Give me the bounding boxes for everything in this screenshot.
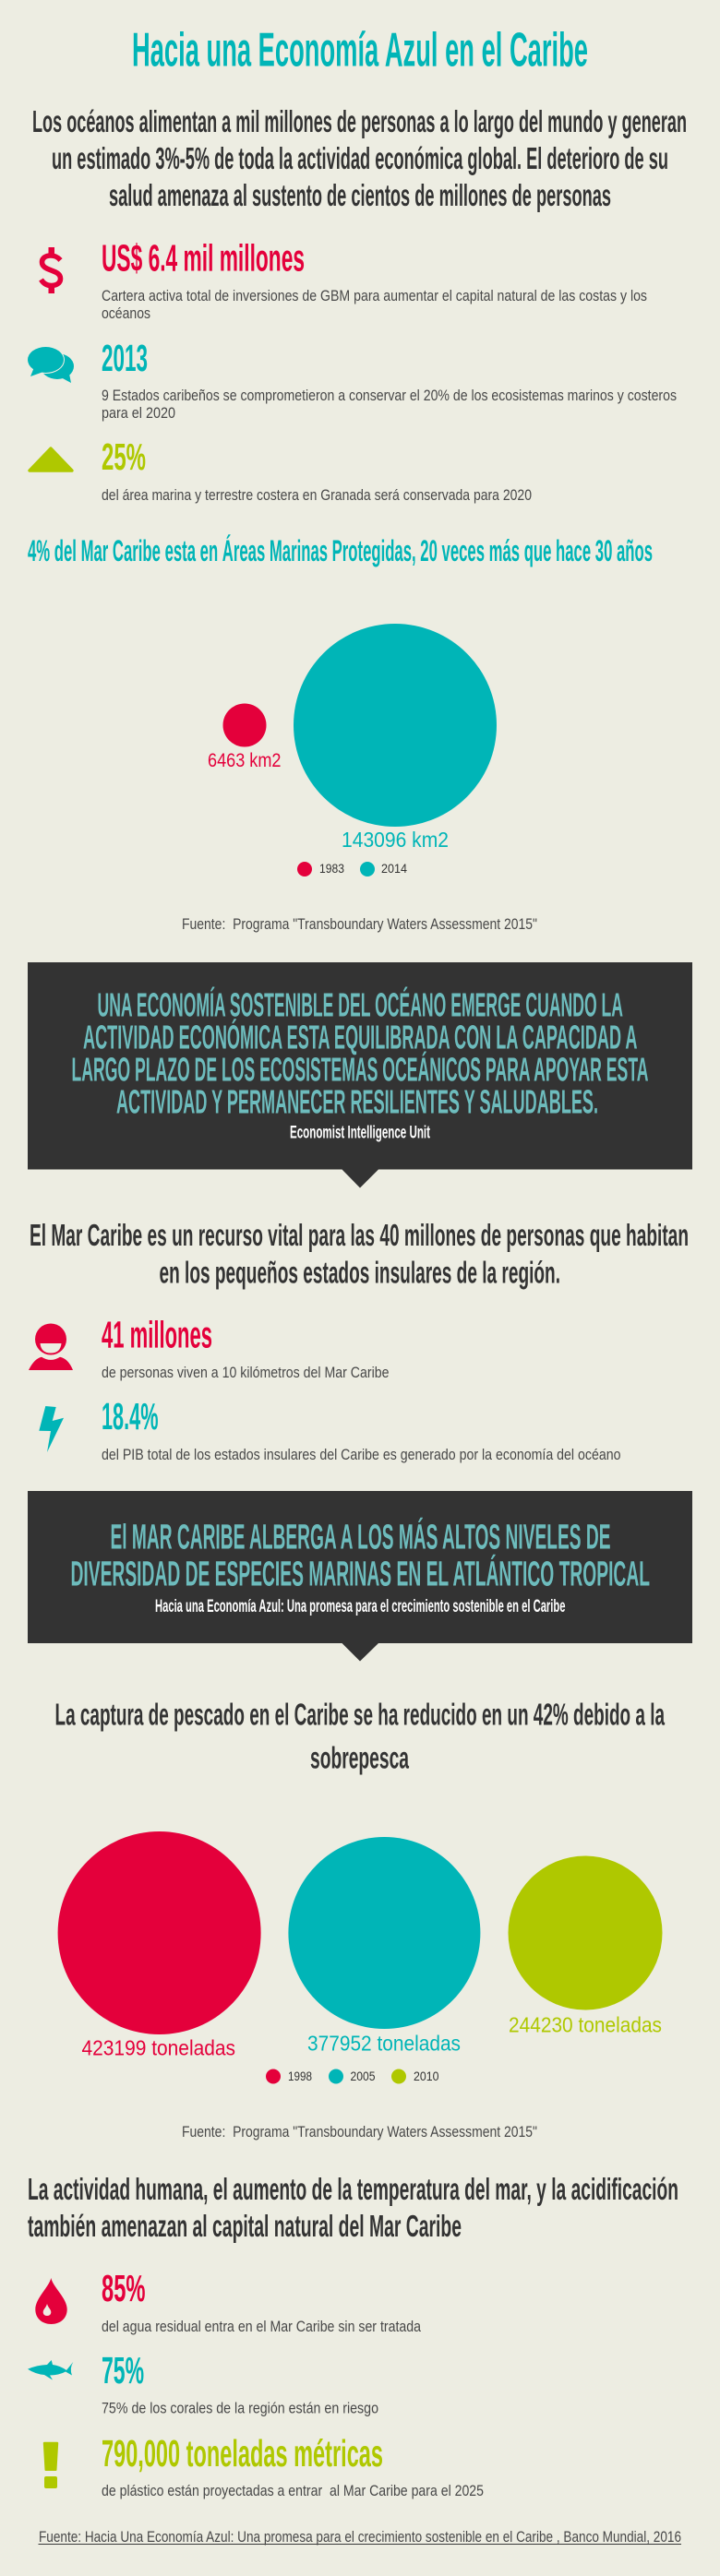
legend bbox=[297, 861, 407, 877]
stat: wastewater bbox=[35, 2267, 421, 2335]
heading: overfishing: sobrepesca bbox=[310, 1740, 409, 1775]
icon: exclamation mark bbox=[43, 2442, 58, 2488]
GDP description: del PIB total de los estados insulares del Caribe es generado por la economía del océano bbox=[102, 1446, 620, 1463]
label 1983: 6463 km2 bbox=[208, 750, 281, 771]
wastewater description: del agua residual entra en el Mar Caribe sin ser tratada bbox=[102, 2318, 421, 2335]
percent description: del área marina y terrestre costera en Granada será conservada para 2020 bbox=[102, 486, 532, 504]
heading: vital resource bbox=[30, 1218, 689, 1290]
stat: 2013 commitment bbox=[28, 337, 677, 422]
corals value: 75% bbox=[102, 2349, 144, 2391]
year value: 2013 bbox=[102, 337, 148, 379]
investment value: US$ 6.4 mil millones bbox=[102, 236, 305, 279]
plastic value: 790,000 toneladas métricas bbox=[102, 2432, 383, 2475]
stat: plastic bbox=[43, 2432, 484, 2499]
legend: 2014 bbox=[381, 861, 407, 876]
quote bbox=[70, 1517, 650, 1594]
stat: corals bbox=[28, 2349, 378, 2417]
people value: 41 millones bbox=[102, 1314, 212, 1356]
label 2010: 244230 toneladas bbox=[509, 2013, 662, 2037]
icon: lightning bolt bbox=[39, 1406, 64, 1452]
icon: water drop bbox=[35, 2278, 67, 2324]
percent value: 25% bbox=[102, 435, 146, 478]
legend: 1983 bbox=[319, 861, 344, 876]
label 1998: 423199 toneladas bbox=[81, 2035, 235, 2059]
stat: 18.4 percent bbox=[39, 1395, 621, 1463]
stat: investment bbox=[41, 236, 647, 322]
attribution: Economist Intelligence Unit bbox=[290, 1124, 430, 1142]
plastic description: de plástico están proyectadas a entrar al Mar Caribe para el 2025 bbox=[102, 2482, 484, 2499]
stat: 25 percent bbox=[30, 435, 532, 504]
quote bbox=[72, 985, 648, 1120]
legend: 2010 bbox=[414, 2069, 439, 2083]
heading: overfishing bbox=[55, 1698, 665, 1775]
label 2005: 377952 toneladas bbox=[307, 2032, 461, 2056]
bubble chart: protected area bbox=[208, 624, 497, 877]
commitment description: para el 2020 bbox=[102, 404, 175, 422]
legend: 2005 bbox=[351, 2069, 376, 2083]
bubble 2014 bbox=[294, 624, 497, 827]
bubble 2010 bbox=[508, 1856, 663, 2010]
icon: shark bbox=[28, 2360, 73, 2380]
bubble chart: fish catch bbox=[58, 1831, 663, 2083]
corals description: 75% de los corales de la región están en riesgo bbox=[102, 2399, 378, 2417]
source note: Fuente: Programa "Transboundary Waters Assessment 2015" bbox=[182, 915, 537, 933]
icon: chat bubbles bbox=[28, 347, 74, 383]
intro heading bbox=[32, 104, 687, 212]
legend bbox=[266, 2069, 439, 2083]
bubble 2005 bbox=[288, 1837, 480, 2029]
label 2014: 143096 km2 bbox=[342, 828, 449, 852]
commitment description bbox=[102, 387, 677, 422]
bubble 1983 bbox=[223, 703, 266, 747]
callout: sustainable economy bbox=[28, 962, 692, 1188]
wastewater value: 85% bbox=[102, 2267, 146, 2309]
source note: Fuente: Programa "Transboundary Waters Assessment 2015" bbox=[182, 2123, 537, 2141]
icon: triangle bbox=[30, 448, 72, 471]
bubble 1998 bbox=[58, 1831, 261, 2034]
icon: person bbox=[29, 1323, 73, 1370]
GDP value: 18.4% bbox=[102, 1395, 159, 1437]
stat: 41 million bbox=[29, 1314, 390, 1381]
people description: de personas viven a 10 kilómetros del Mar Caribe bbox=[102, 1364, 390, 1381]
heading: threats bbox=[28, 2172, 678, 2243]
callout: biodiversity bbox=[28, 1491, 692, 1661]
investment description bbox=[102, 287, 647, 322]
legend: 1998 bbox=[288, 2069, 312, 2083]
icon: dollar bbox=[41, 247, 61, 293]
investment description: océanos bbox=[102, 304, 150, 322]
